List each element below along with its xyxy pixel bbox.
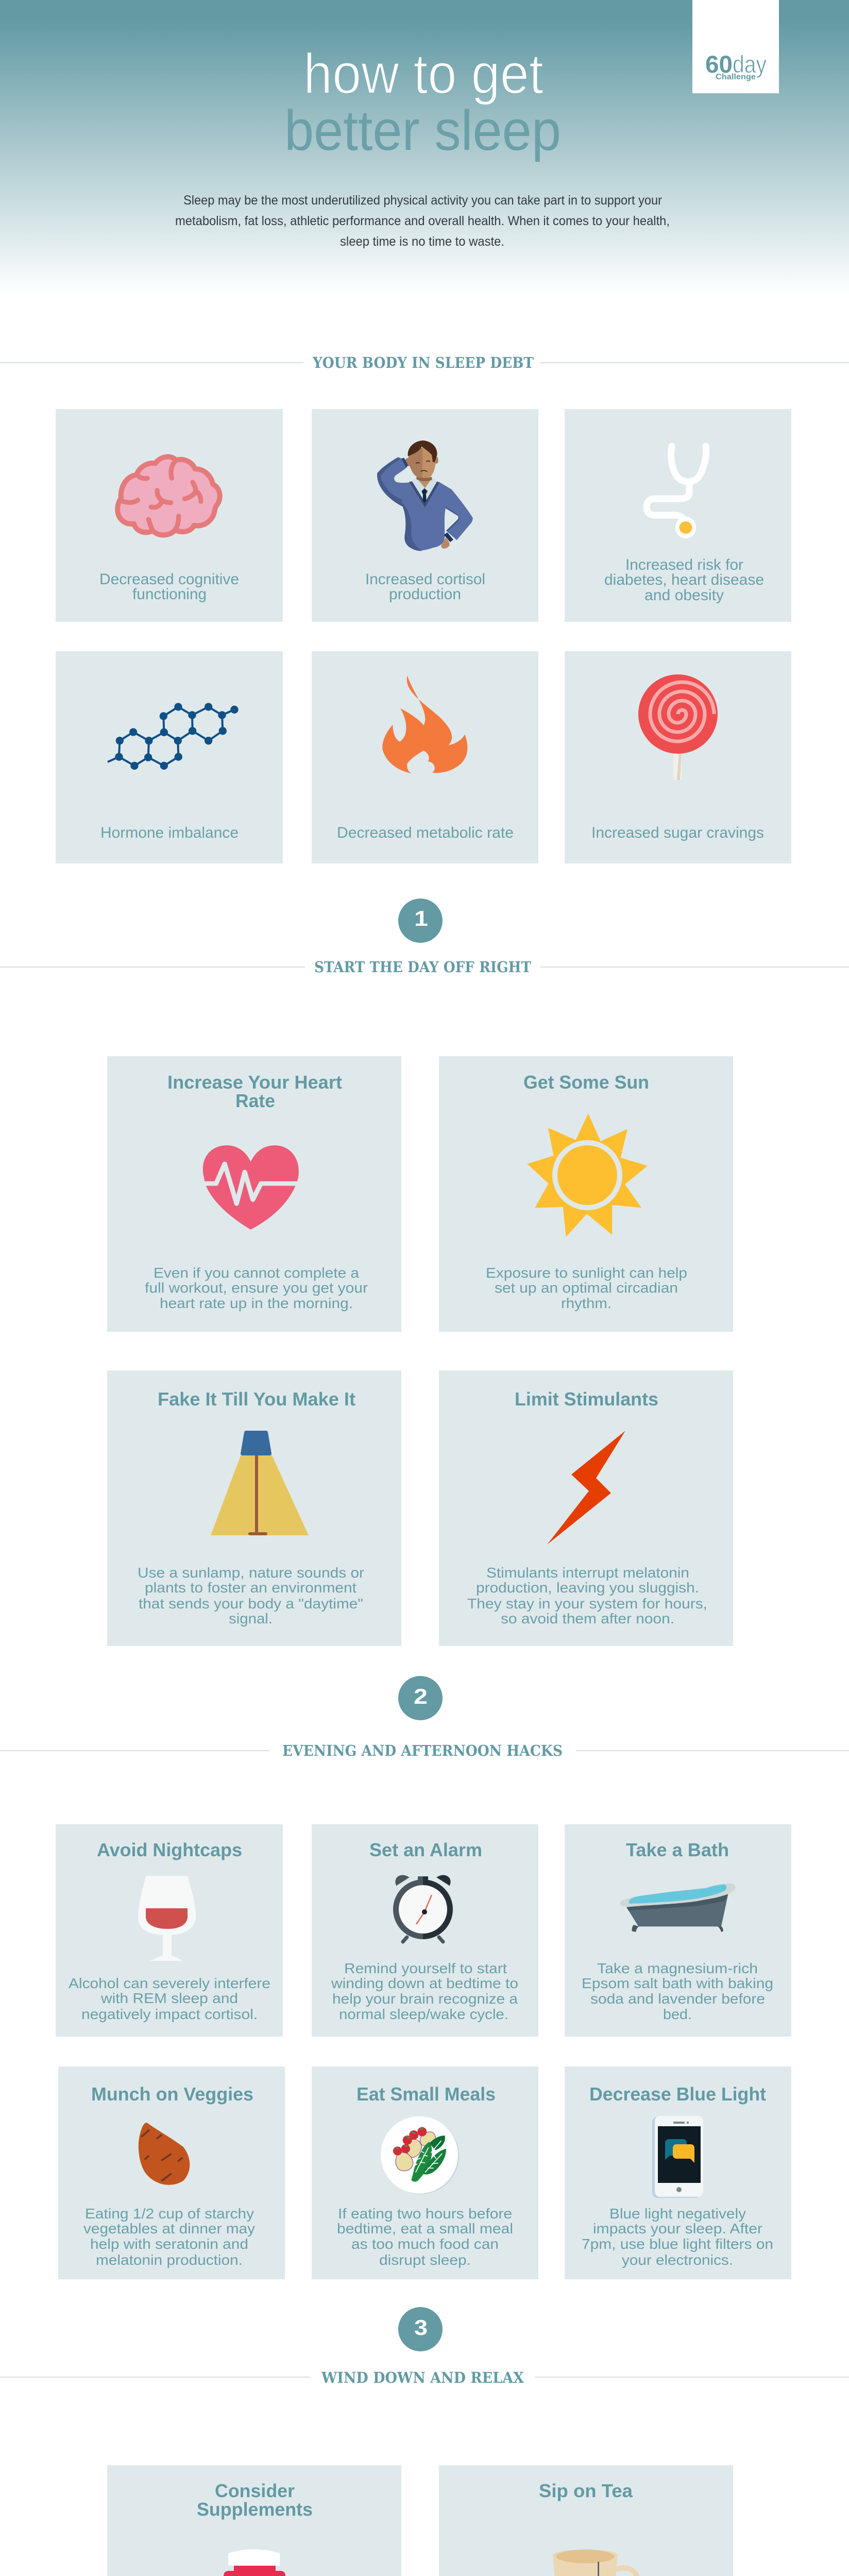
- panel: increased risk for diabetes, heart disease and obesity: [565, 409, 791, 622]
- body text: with REM sleep and: [100, 1990, 238, 2006]
- body text: full workout, ensure you get your: [145, 1280, 368, 1296]
- body text: [331, 1960, 518, 2022]
- panel: limit stimulants: [439, 1370, 733, 1646]
- body text: [582, 2206, 773, 2268]
- body text: Remind yourself to start: [344, 1960, 507, 1976]
- body text: negatively impact cortisol.: [81, 2006, 258, 2022]
- body text: Exposure to sunlight can help: [486, 1265, 687, 1281]
- label: Increased cortisol: [365, 571, 485, 588]
- logo: 60 day challenge: Challenge: [716, 73, 756, 81]
- label: [365, 571, 485, 603]
- panel: hormone imbalance: [56, 651, 283, 863]
- heading: Get Some Sun: [523, 1072, 649, 1093]
- heading: Decrease Blue Light: [589, 2083, 766, 2105]
- icon: heart with pulse: [203, 1145, 299, 1230]
- label: Decreased cognitive: [99, 571, 239, 588]
- title: how to get: how to get: [303, 42, 544, 106]
- intro paragraph: Sleep may be the most underutilized physical activity you can take part in to support your: [183, 193, 662, 208]
- logo: 60 day challenge: [692, 0, 779, 93]
- badge: number 3: [398, 2307, 443, 2351]
- label: Decreased metabolic rate: [337, 824, 514, 841]
- logo: 60 day challenge: 60: [705, 50, 733, 78]
- icon: bathtub: [620, 1884, 736, 1932]
- section heading: start the day off right: START THE DAY OFF RIGHT: [314, 958, 531, 976]
- body text: soda and lavender before: [590, 1991, 765, 2007]
- panel: decrease blue light: [565, 2066, 791, 2279]
- body text: Even if you cannot complete a: [154, 1265, 359, 1281]
- panel: decreased metabolic rate: [312, 651, 538, 863]
- label: [99, 571, 239, 603]
- badge: number 3: 3: [414, 2315, 428, 2340]
- panel: increase your heart rate: [107, 1056, 401, 1332]
- heading: Limit Stimulants: [515, 1388, 658, 1410]
- label: production: [389, 586, 461, 603]
- heading: Avoid Nightcaps: [97, 1839, 242, 1860]
- intro paragraph: [175, 193, 670, 249]
- body text: [582, 1960, 773, 2022]
- icon: wine glass: [138, 1876, 196, 1961]
- panel: sip on tea: [439, 2465, 733, 2576]
- heading: [167, 1072, 342, 1111]
- body text: so avoid them after noon.: [501, 1611, 674, 1626]
- body text: [486, 1265, 687, 1311]
- panel: get some sun: [439, 1056, 733, 1332]
- body text: If eating two hours before: [338, 2206, 512, 2222]
- icon: smartphone: [652, 2116, 703, 2198]
- heading: Sip on Tea: [539, 2480, 633, 2501]
- body text: Eating 1/2 cup of starchy: [85, 2206, 254, 2222]
- heading: Set an Alarm: [369, 1839, 482, 1860]
- section heading: evening and afternoon hacks: EVENING AND AFTERNOON HACKS: [282, 1742, 563, 1759]
- body text: Stimulants interrupt melatonin: [486, 1565, 689, 1581]
- heading: Consider: [215, 2480, 295, 2501]
- heading: Eat Small Meals: [356, 2083, 496, 2105]
- icon: lollipop: [638, 674, 718, 780]
- intro paragraph: sleep time is no time to waste.: [340, 234, 504, 249]
- icon: supplement jar: [224, 2549, 285, 2576]
- header banner: [0, 0, 849, 295]
- label: [604, 556, 764, 604]
- body text: as too much food can: [351, 2236, 499, 2252]
- body text: Alcohol can severely interfere: [69, 1975, 270, 1991]
- panel: decreased cognitive functioning: [56, 409, 283, 622]
- heading: Take a Bath: [626, 1839, 729, 1860]
- body text: help your brain recognize a: [332, 1991, 518, 2007]
- label: functioning: [132, 586, 207, 603]
- label: Hormone imbalance: [100, 824, 239, 841]
- label: and obesity: [644, 587, 724, 604]
- body text: Blue light negatively: [609, 2206, 746, 2222]
- body text: Take a magnesium-rich: [597, 1960, 758, 1976]
- heading: Munch on Veggies: [91, 2083, 253, 2105]
- body text: [145, 1265, 368, 1311]
- icon: plate of food: [381, 2116, 459, 2194]
- badge: number 1: [398, 899, 443, 943]
- icon: flame: [382, 675, 467, 773]
- icon: sun: [527, 1113, 648, 1237]
- body text: Use a sunlamp, nature sounds or: [138, 1565, 364, 1581]
- heading: Increase Your Heart: [167, 1072, 342, 1093]
- body text: bed.: [663, 2006, 692, 2022]
- panel: fake it till you make it: [107, 1370, 401, 1646]
- section heading: wind down and relax: WIND DOWN AND RELAX: [321, 2369, 524, 2386]
- panel: take a bath: [565, 1824, 791, 2037]
- title: better sleep: better sleep: [284, 99, 561, 162]
- panel: eat small meals: [312, 2066, 538, 2279]
- icon: tea mug: [553, 2550, 638, 2576]
- icon: brain: [117, 456, 220, 535]
- body text: [83, 2206, 255, 2268]
- panel: avoid nightcaps: [56, 1824, 283, 2037]
- heading: [197, 2480, 313, 2520]
- logo: 60 day challenge: day: [733, 50, 767, 78]
- label: diabetes, heart disease: [604, 571, 764, 588]
- body text: signal.: [229, 1611, 273, 1626]
- badge: number 2: [398, 1676, 443, 1720]
- body text: disrupt sleep.: [379, 2252, 471, 2268]
- icon: lightning bolt: [547, 1431, 625, 1545]
- panel: increased cortisol production: [312, 409, 538, 622]
- panel: increased sugar cravings: [565, 651, 791, 863]
- body text: rhythm.: [561, 1295, 612, 1311]
- body text: melatonin production.: [96, 2252, 243, 2268]
- intro paragraph: metabolism, fat loss, athletic performance and overall health. When it comes to your health,: [175, 214, 670, 228]
- icon: alarm clock: [393, 1876, 453, 1942]
- heading: Fake It Till You Make It: [158, 1388, 355, 1410]
- body text: bedtime, eat a small meal: [337, 2221, 513, 2236]
- body text: [69, 1975, 270, 2022]
- badge: number 2: 2: [414, 1684, 428, 1708]
- body text: help with seratonin and: [90, 2236, 248, 2252]
- body text: plants to foster an environment: [145, 1580, 356, 1596]
- label: Increased sugar cravings: [591, 824, 764, 841]
- body text: heart rate up in the morning.: [160, 1295, 353, 1311]
- panel: munch on veggies: [58, 2066, 285, 2279]
- body text: They stay in your system for hours,: [467, 1596, 707, 1612]
- body text: [337, 2206, 513, 2268]
- body text: [138, 1565, 364, 1626]
- badge: number 1: 1: [414, 906, 428, 930]
- icon: stressed man: [377, 440, 473, 551]
- body text: Epsom salt bath with baking: [582, 1975, 773, 1991]
- body text: your electronics.: [622, 2252, 733, 2268]
- body text: normal sleep/wake cycle.: [339, 2006, 508, 2022]
- body text: vegetables at dinner may: [83, 2221, 255, 2236]
- section heading: your body in sleep debt: YOUR BODY IN SLEEP DEBT: [312, 354, 534, 371]
- body text: 7pm, use blue light filters on: [582, 2236, 773, 2252]
- body text: impacts your sleep. After: [593, 2221, 762, 2236]
- heading: Supplements: [197, 2499, 313, 2520]
- icon: molecule: [108, 703, 239, 770]
- icon: stethoscope: [647, 446, 706, 538]
- body text: [467, 1565, 707, 1626]
- body text: that sends your body a "daytime": [139, 1596, 363, 1612]
- body text: production, leaving you sluggish.: [476, 1580, 699, 1596]
- label: Increased risk for: [625, 556, 743, 573]
- panel: consider supplements: [107, 2465, 401, 2576]
- icon: sunlamp: [211, 1431, 309, 1535]
- panel: set an alarm: [312, 1824, 538, 2037]
- body text: set up an optimal circadian: [495, 1280, 678, 1296]
- icon: sweet potato: [139, 2123, 190, 2185]
- heading: Rate: [235, 1090, 275, 1111]
- body text: winding down at bedtime to: [331, 1975, 518, 1991]
